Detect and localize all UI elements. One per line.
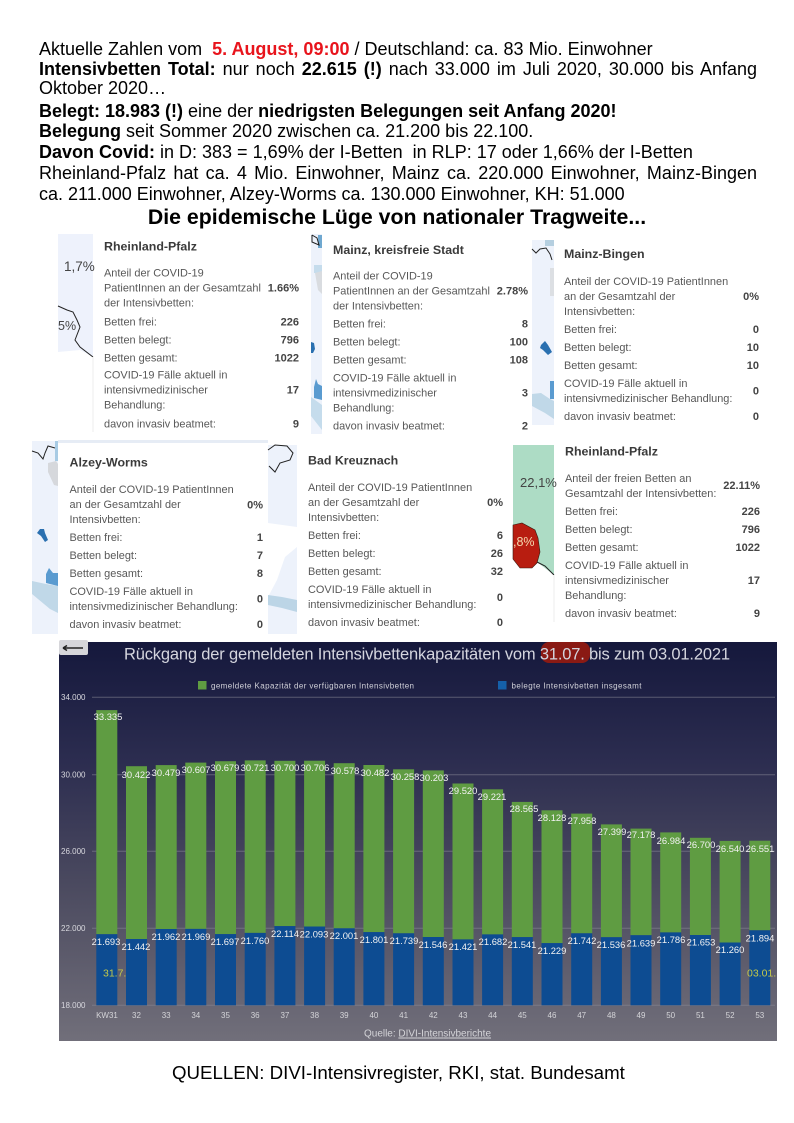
capacity value labels: 30.258 xyxy=(391,771,419,782)
y axis labels xyxy=(61,693,86,1010)
capacity value labels: 30.700 xyxy=(271,762,299,773)
capacity value labels: 28.128 xyxy=(538,812,566,823)
table rows: 22.11% xyxy=(723,480,760,492)
chart source: Quelle: DIVI-Intensivberichte xyxy=(364,1028,491,1040)
table rows: 0 xyxy=(753,411,759,423)
panel: Bad Kreuznach xyxy=(268,445,503,634)
table rows: 32 xyxy=(491,566,503,578)
panel title: Alzey-Worms xyxy=(70,456,148,470)
capacity value labels: 26.551 xyxy=(746,843,774,854)
table rows: 0% xyxy=(743,291,759,303)
heading: Die epidemische Lüge von nationaler Tragweite... xyxy=(148,205,646,229)
x axis labels: 41 xyxy=(399,1011,409,1020)
table rows: 0% xyxy=(487,497,503,509)
table rows: Anteil der COVID-19 PatientInnen xyxy=(564,276,728,288)
table rows: Betten gesamt: xyxy=(333,354,407,366)
occupied value labels: 21.962 xyxy=(152,931,180,942)
population line: Rheinland-Pfalz hat ca. 4 Mio. Einwohner, Mainz ca. 220.000 Einwohner, Mainz-Bingen xyxy=(39,163,757,183)
table rows: an der Gesamtzahl der xyxy=(564,291,676,303)
x axis labels: 53 xyxy=(755,1011,765,1020)
panel title: Rheinland-Pfalz xyxy=(565,444,658,458)
table rows: Behandlung: xyxy=(565,590,626,602)
table rows: Betten frei: xyxy=(104,316,157,328)
legend: belegte Intensivbetten insgesamt xyxy=(512,682,642,690)
panel title: Mainz-Bingen xyxy=(564,247,645,261)
table rows: 6 xyxy=(497,530,503,542)
occupied value labels: 22.001 xyxy=(330,930,358,941)
capacity value labels: 30.422 xyxy=(122,769,150,780)
x axis labels: 43 xyxy=(459,1011,468,1020)
panel: Rheinland-Pfalz share xyxy=(58,234,299,432)
table rows: Behandlung: xyxy=(333,402,394,414)
map: free beds xyxy=(513,445,557,622)
table rows: 226 xyxy=(742,506,760,518)
intro text block xyxy=(39,39,757,204)
table rows: 17 xyxy=(748,575,760,587)
chart title: Rückgang der gemeldeten Intensivbettenkapazitäten vom 31.07. bis zum 03.01.2021 xyxy=(124,646,730,664)
table rows: COVID-19 Fälle aktuell in xyxy=(308,584,431,596)
table rows: Anteil der COVID-19 xyxy=(333,270,433,282)
occupied value labels: 21.536 xyxy=(597,939,625,950)
table rows: 0 xyxy=(753,386,759,398)
x axis labels: 44 xyxy=(488,1011,498,1020)
table rows: 0 xyxy=(497,592,503,604)
table rows: 0 xyxy=(497,617,503,629)
x axis labels: 33 xyxy=(162,1011,171,1020)
table rows: COVID-19 Fälle aktuell in xyxy=(565,560,688,572)
table rows: Betten belegt: xyxy=(333,336,400,348)
table rows: an der Gesamtzahl der xyxy=(70,499,181,511)
date annotations: 03.01. xyxy=(747,968,776,980)
table rows: Betten gesamt: xyxy=(564,360,638,372)
capacity value labels: 26.984 xyxy=(657,835,685,846)
occupied value labels: 21.639 xyxy=(627,938,655,948)
occupied value labels: 21.682 xyxy=(479,936,507,947)
date annotations: 31.7. xyxy=(103,968,126,980)
capacity value labels: 30.578 xyxy=(331,765,359,776)
table rows: COVID-19 Fälle aktuell in xyxy=(333,372,456,384)
capacity value labels: 28.565 xyxy=(510,803,538,814)
table rows: 3 xyxy=(522,388,528,400)
table rows xyxy=(333,270,528,432)
capacity value labels: 33.335 xyxy=(94,711,122,722)
x axis labels: 42 xyxy=(429,1011,438,1020)
table rows: Betten frei: xyxy=(565,506,618,518)
x axis labels: 47 xyxy=(577,1011,587,1020)
table rows: 100 xyxy=(510,336,528,348)
table rows: 0 xyxy=(753,324,759,336)
table rows: Anteil der COVID-19 PatientInnen xyxy=(308,482,472,494)
table rows: Anteil der freien Betten an xyxy=(565,473,691,485)
x axis labels xyxy=(96,1011,765,1020)
total beds line continued: Oktober 2020… xyxy=(39,78,166,98)
capacity value labels: 29.221 xyxy=(478,791,506,802)
table rows: 226 xyxy=(281,316,299,328)
map: free beds: 22,1% xyxy=(520,475,557,490)
table rows: 26 xyxy=(491,548,503,560)
y axis labels: 34.000 xyxy=(61,693,86,702)
y axis labels: 30.000 xyxy=(61,770,86,780)
table rows: intensivmedizinischer Behandlung: xyxy=(564,393,732,405)
bar chart: Intensivbettenkapazitäten xyxy=(59,640,777,1041)
x axis labels: 48 xyxy=(607,1011,616,1020)
table rows: Betten gesamt: xyxy=(308,566,382,578)
occupied value labels: 21.260 xyxy=(716,944,744,955)
table rows: 9 xyxy=(293,418,299,430)
table rows: Betten gesamt: xyxy=(70,568,143,580)
table rows: Anteil der COVID-19 PatientInnen xyxy=(70,484,234,496)
table rows: 1 xyxy=(257,532,263,544)
occupied value labels: 21.894 xyxy=(746,932,774,944)
legend xyxy=(198,681,642,690)
table rows: Behandlung: xyxy=(104,400,165,412)
occupied value labels: 21.697 xyxy=(211,936,239,947)
table rows: 8 xyxy=(522,318,528,330)
map: Bad Kreuznach xyxy=(268,445,297,634)
occupied value labels: 22.114 xyxy=(271,928,299,939)
table rows: 2 xyxy=(522,420,528,432)
x axis labels: 32 xyxy=(132,1011,141,1020)
capacity value labels: 27.958 xyxy=(568,815,596,826)
table rows: PatientInnen an der Gesamtzahl xyxy=(104,282,261,294)
table rows: 796 xyxy=(281,334,299,346)
table rows: 0% xyxy=(247,500,263,512)
occupied value labels: 21.421 xyxy=(449,941,477,952)
map: Rheinland-Pfalz xyxy=(58,234,95,432)
capacity value labels: 30.721 xyxy=(241,762,269,773)
x axis labels: 49 xyxy=(637,1011,646,1020)
table rows: Betten frei: xyxy=(564,324,617,336)
capacity value labels: 30.679 xyxy=(211,762,239,773)
occupied beds line: Belegt: 18.983 (!) eine der niedrigsten Belegungen seit Anfang 2020! xyxy=(39,101,617,121)
x axis labels: 37 xyxy=(280,1011,290,1020)
capacity value labels: 26.540 xyxy=(716,843,744,854)
x axis labels: 52 xyxy=(726,1011,735,1020)
occupied value labels: 21.693 xyxy=(92,936,120,947)
y axis labels: 22.000 xyxy=(61,924,86,933)
table rows: Betten belegt: xyxy=(564,342,632,354)
legend: gemeldete Kapazität der verfügbaren Intensivbetten xyxy=(211,682,414,690)
population line continued: ca. 211.000 Einwohner, Alzey-Worms ca. 130.000 Einwohner, KH: 51.000 xyxy=(39,184,625,204)
table rows: Gesamtzahl der Intensivbetten: xyxy=(565,488,716,500)
panel title: Rheinland-Pfalz xyxy=(104,240,197,254)
table rows: COVID-19 Fälle aktuell in xyxy=(70,586,193,598)
table rows: Betten belegt: xyxy=(70,550,137,562)
table rows: Betten belegt: xyxy=(565,524,632,536)
table rows: 8 xyxy=(257,568,263,580)
table rows: Betten belegt: xyxy=(104,334,172,346)
x axis labels: 35 xyxy=(221,1011,230,1020)
table rows: intensivmedizinischer xyxy=(104,384,208,396)
table rows xyxy=(70,484,263,631)
occupied value labels: 21.546 xyxy=(419,939,447,950)
green capacity bars xyxy=(96,710,770,943)
occupied value labels: 21.739 xyxy=(390,935,418,946)
table rows: Betten frei: xyxy=(70,532,122,544)
table rows: intensivmedizinischer Behandlung: xyxy=(308,599,476,611)
map: Mainz-Bingen xyxy=(532,240,554,425)
occupied value labels: 21.760 xyxy=(241,935,269,946)
x axis labels: 51 xyxy=(696,1011,705,1020)
capacity value labels: 30.479 xyxy=(152,767,180,778)
occupied value labels: 21.442 xyxy=(122,941,150,952)
occupied value labels: 21.742 xyxy=(568,935,596,946)
capacity value labels: 27.399 xyxy=(598,826,626,837)
table rows: davon invasiv beatmet: xyxy=(565,608,677,620)
x axis labels: KW31 xyxy=(96,1011,118,1020)
table rows: intensivmedizinischer xyxy=(333,388,437,400)
x axis labels: 34 xyxy=(191,1011,201,1020)
table rows: 0 xyxy=(257,619,263,631)
panel title: Bad Kreuznach xyxy=(308,454,398,468)
table rows: COVID-19 Fälle aktuell in xyxy=(104,370,227,382)
x axis labels: 36 xyxy=(251,1011,260,1020)
capacity value labels: 30.203 xyxy=(420,772,448,783)
occupied value labels: 21.969 xyxy=(182,931,210,942)
table rows: 0 xyxy=(257,594,263,606)
table rows: COVID-19 Fälle aktuell in xyxy=(564,378,687,390)
table rows: 1022 xyxy=(736,542,760,554)
table rows: Intensivbetten: xyxy=(70,514,141,526)
table rows: der Intensivbetten: xyxy=(333,300,423,312)
table rows: Betten gesamt: xyxy=(104,352,178,364)
date annotations xyxy=(103,968,776,980)
map: Rheinland-Pfalz: 5% xyxy=(58,319,76,333)
y axis labels: 26.000 xyxy=(61,847,86,856)
map: Alzey-Worms xyxy=(32,440,268,634)
table rows xyxy=(564,276,759,423)
occupied value labels xyxy=(92,928,774,956)
table rows: 7 xyxy=(257,550,263,562)
table rows: 1022 xyxy=(275,352,299,364)
table rows: intensivmedizinischer Behandlung: xyxy=(70,601,238,613)
table rows: 10 xyxy=(747,342,759,354)
table rows: davon invasiv beatmet: xyxy=(104,418,216,430)
covid share line: Davon Covid: in D: 383 = 1,69% der I-Betten in RLP: 17 oder 1,66% der I-Betten xyxy=(39,142,693,162)
table rows: Betten gesamt: xyxy=(565,542,639,554)
table rows: davon invasiv beatmet: xyxy=(70,619,181,631)
table rows: Betten frei: xyxy=(308,530,361,542)
table rows: intensivmedizinischer xyxy=(565,575,669,587)
icon: back arrow button xyxy=(59,640,88,655)
table rows: 796 xyxy=(742,524,760,536)
panel: Rheinland-Pfalz free beds xyxy=(513,444,760,622)
panel: Alzey-Worms xyxy=(32,440,268,634)
sources footer: QUELLEN: DIVI-Intensivregister, RKI, stat. Bundesamt xyxy=(172,1062,625,1083)
panel title: Mainz, kreisfreie Stadt xyxy=(333,243,464,257)
y axis labels: 18.000 xyxy=(61,1001,86,1010)
table rows: davon invasiv beatmet: xyxy=(564,411,676,423)
x axis labels: 40 xyxy=(369,1011,379,1020)
total beds line: Intensivbetten Total: nur noch 22.615 (!) nach 33.000 im Juli 2020, 30.000 bis Anfang xyxy=(39,59,757,79)
table rows xyxy=(104,268,299,430)
table rows: davon invasiv beatmet: xyxy=(308,617,420,629)
capacity value labels: 26.700 xyxy=(687,839,715,850)
table rows xyxy=(565,473,760,620)
capacity value labels xyxy=(94,711,774,854)
panel: Mainz-Bingen xyxy=(532,240,759,425)
capacity value labels: 29.520 xyxy=(449,785,477,796)
occupied value labels: 21.541 xyxy=(508,939,536,950)
table rows: 108 xyxy=(510,354,528,366)
map: free beds: ,8% xyxy=(513,535,535,549)
map: Mainz xyxy=(311,234,322,434)
table rows: 10 xyxy=(747,360,759,372)
table rows: Intensivbetten: xyxy=(308,512,379,524)
capacity value labels: 27.178 xyxy=(627,829,655,840)
blue occupied bars xyxy=(96,926,770,1005)
table rows: Anteil der COVID-19 xyxy=(104,268,204,280)
x axis labels: 45 xyxy=(518,1011,527,1020)
occupied value labels: 21.653 xyxy=(687,936,715,948)
capacity value labels: 30.482 xyxy=(361,767,389,778)
occupied value labels: 21.801 xyxy=(360,934,388,945)
table rows: PatientInnen an der Gesamtzahl xyxy=(333,286,490,298)
table rows: 17 xyxy=(287,384,299,396)
table rows: Betten belegt: xyxy=(308,548,376,560)
table rows: Intensivbetten: xyxy=(564,306,635,318)
x axis labels: 46 xyxy=(548,1011,557,1020)
table rows: an der Gesamtzahl der xyxy=(308,497,420,509)
x axis labels: 50 xyxy=(666,1011,676,1020)
map: Rheinland-Pfalz: 1,7% xyxy=(64,259,95,274)
capacity value labels: 30.607 xyxy=(182,764,210,775)
occupied value labels: 21.786 xyxy=(657,934,685,945)
panel: Mainz, kreisfreie Stadt xyxy=(311,234,528,434)
table rows: der Intensivbetten: xyxy=(104,298,194,310)
table rows: 2.78% xyxy=(497,286,528,298)
occupied value labels: 22.093 xyxy=(300,928,328,940)
table rows: Betten frei: xyxy=(333,318,386,330)
table rows: 1.66% xyxy=(268,282,299,294)
capacity value labels: 30.706 xyxy=(301,762,329,773)
date line: Aktuelle Zahlen vom 5. August, 09:00 / Deutschland: ca. 83 Mio. Einwohner xyxy=(39,39,653,59)
table rows: 9 xyxy=(754,608,760,620)
occupied value labels: 21.229 xyxy=(538,945,566,956)
table rows: davon invasiv beatmet: xyxy=(333,420,445,432)
table rows xyxy=(308,482,503,629)
occupancy line: Belegung seit Sommer 2020 zwischen ca. 21.200 bis 22.100. xyxy=(39,121,533,141)
x axis labels: 39 xyxy=(340,1011,349,1020)
x axis labels: 38 xyxy=(310,1011,320,1020)
